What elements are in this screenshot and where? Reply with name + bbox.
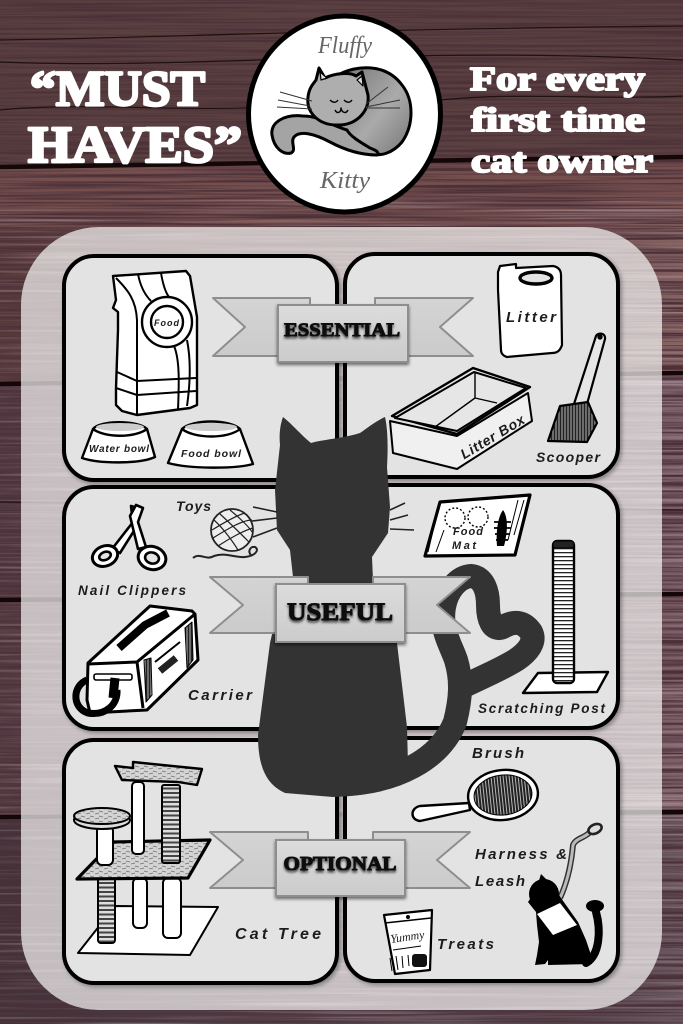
panel: useful left bbox=[64, 487, 337, 729]
label: litter box: Litter Box bbox=[457, 411, 528, 462]
banner: optional bbox=[210, 832, 470, 896]
heading: essential: ESSENTIAL bbox=[284, 320, 400, 341]
subtitle: for every first time cat owner: first time bbox=[471, 102, 645, 139]
icon: food bowl bbox=[168, 422, 253, 468]
icon: treats bag bbox=[384, 910, 432, 974]
label: water bowl: Water bowl bbox=[89, 444, 149, 455]
label: nail clippers: Nail Clippers bbox=[78, 583, 186, 598]
label: harness and leash: Harness & bbox=[475, 846, 567, 863]
icon: litter box bbox=[390, 368, 532, 469]
banner: essential bbox=[213, 298, 473, 362]
logo: fluffy kitty bbox=[248, 16, 440, 212]
icon: scooper bbox=[536, 334, 605, 465]
label: harness and leash bbox=[475, 846, 567, 890]
panel: essential litter bbox=[345, 254, 618, 477]
label: scratching post: Scratching Post bbox=[478, 701, 606, 716]
icon: cat tree bbox=[74, 762, 218, 955]
title: must haves bbox=[28, 60, 242, 174]
icon: yarn ball bbox=[193, 509, 257, 558]
label: food: Food bbox=[154, 318, 180, 328]
label: scooper: Scooper bbox=[536, 449, 602, 465]
whiskers bbox=[252, 503, 414, 537]
icon: litter jug bbox=[498, 264, 562, 357]
subtitle: for every first time cat owner bbox=[470, 61, 653, 180]
cat tail heart bbox=[345, 576, 533, 784]
label: food mat: Food bbox=[453, 526, 483, 538]
icon: water bowl bbox=[82, 422, 155, 462]
label: cat tree: Cat Tree bbox=[235, 926, 321, 943]
panel: essential food bbox=[64, 256, 337, 480]
icon: food bag bbox=[113, 271, 197, 415]
label: litter: Litter bbox=[506, 309, 557, 326]
panel: useful right bbox=[345, 485, 618, 728]
logo text: fluffy: Fluffy bbox=[317, 33, 372, 59]
title: must haves: “MUST bbox=[30, 60, 205, 116]
label: treats: Treats bbox=[437, 936, 494, 953]
logo text: kitty: Kitty bbox=[319, 168, 370, 194]
icon: brush bbox=[412, 766, 540, 824]
icon: carrier bbox=[76, 606, 198, 713]
label: food bowl: Food bowl bbox=[181, 448, 242, 460]
icon: food mat: Mat bbox=[452, 540, 477, 552]
logo cat bbox=[272, 68, 411, 155]
icon: cat with harness and leash bbox=[528, 822, 604, 965]
label: toys: Toys bbox=[176, 498, 211, 514]
banner: useful bbox=[210, 577, 470, 642]
label: yummy: Yummy bbox=[389, 927, 426, 946]
heading: optional: OPTIONAL bbox=[284, 853, 396, 875]
panel: optional left bbox=[64, 740, 337, 983]
translucent backing panel bbox=[21, 227, 662, 1010]
title: must haves: HAVES” bbox=[28, 117, 242, 174]
cat body bbox=[258, 417, 408, 797]
black cat silhouette bbox=[258, 417, 533, 797]
label: brush: Brush bbox=[472, 745, 524, 762]
icon: scratching post bbox=[523, 541, 608, 693]
icon: food mat bbox=[425, 495, 530, 556]
label: harness and leash: Leash bbox=[475, 873, 525, 890]
label: carrier: Carrier bbox=[188, 687, 253, 704]
subtitle: for every first time cat owner: For every bbox=[470, 61, 645, 98]
panel: optional right bbox=[345, 738, 618, 981]
icon: nail clippers bbox=[89, 505, 168, 573]
heading: useful: USEFUL bbox=[287, 599, 393, 626]
subtitle: for every first time cat owner: cat owner bbox=[471, 143, 653, 180]
